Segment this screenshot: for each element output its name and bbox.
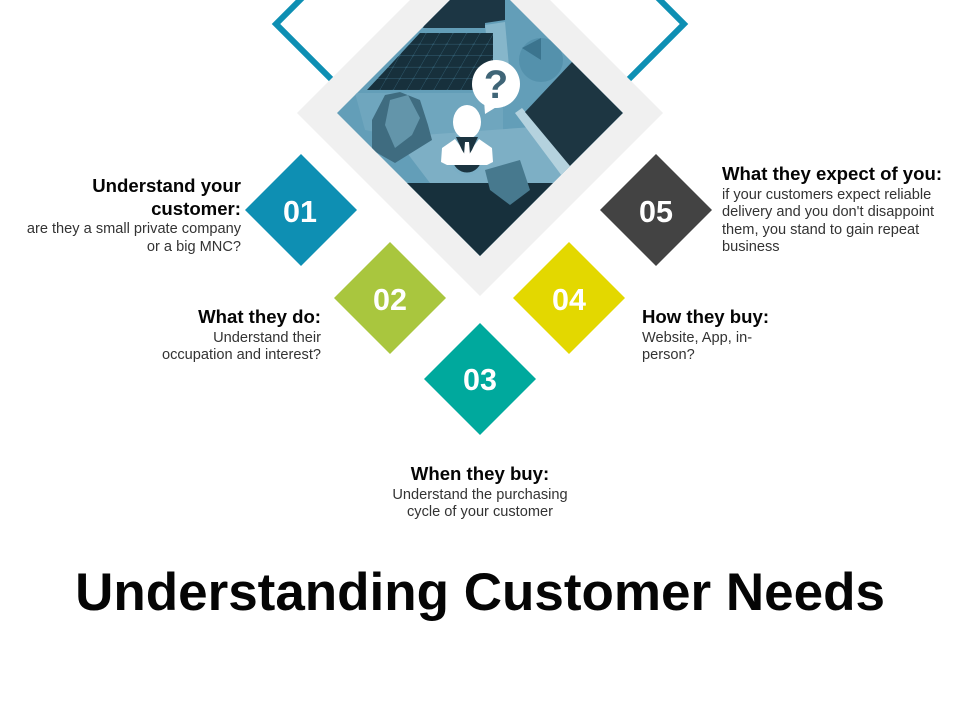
text block: how they buy: Website, App, in- (642, 330, 752, 346)
text block: understand your customer: are they a small private company (27, 221, 242, 237)
text block: understand your customer (27, 175, 242, 255)
title: Understanding Customer Needs (75, 563, 885, 622)
grey diamond backing (297, 0, 663, 296)
text block: how they buy (642, 306, 769, 363)
text block: what they do: occupation and interest? (162, 347, 321, 363)
step 02 diamond (334, 242, 446, 354)
text block: how they buy: How they buy: (642, 306, 769, 327)
central photo: desk with laptop and tablet (337, 0, 623, 260)
text block: what they do: What they do: (198, 306, 321, 327)
text block: what they do (162, 306, 321, 363)
icon: businessman (441, 105, 493, 174)
step 05 diamond (600, 154, 712, 266)
icon: speech bubble with question mark (472, 60, 520, 114)
step 02 diamond: 02 (373, 283, 407, 317)
step 01 diamond: 01 (283, 195, 317, 229)
step 04 diamond (513, 242, 625, 354)
icon: speech bubble with question mark: ? (484, 63, 508, 107)
text block: when they buy: Understand the purchasing (392, 487, 568, 503)
text block: what they expect (722, 163, 942, 255)
text block: what they expect: business (722, 239, 780, 255)
text block: how they buy: person? (642, 347, 695, 363)
text block: what they expect: delivery and you don't disappoint (722, 204, 934, 220)
step 03 diamond (424, 323, 536, 435)
text block: what they expect: if your customers expect reliable (722, 187, 931, 203)
text block: understand your customer: or a big MNC? (147, 239, 241, 255)
text block: what they expect: What they expect of you: (722, 163, 942, 184)
step 05 diamond: 05 (639, 195, 673, 229)
text block: understand your customer: customer: (151, 198, 241, 219)
text block: when they buy: cycle of your customer (407, 504, 553, 520)
step 03 diamond: 03 (463, 363, 497, 397)
text block: what they expect: them, you stand to gain repeat (722, 222, 919, 238)
text block: what they do: Understand their (213, 330, 321, 346)
text block: when they buy: When they buy: (411, 463, 549, 484)
text block: understand your customer: Understand your (92, 175, 241, 196)
text block: when they buy (392, 463, 568, 520)
step 01 diamond (245, 154, 357, 266)
step 04 diamond: 04 (552, 283, 586, 317)
blue outline frame (276, 0, 684, 228)
